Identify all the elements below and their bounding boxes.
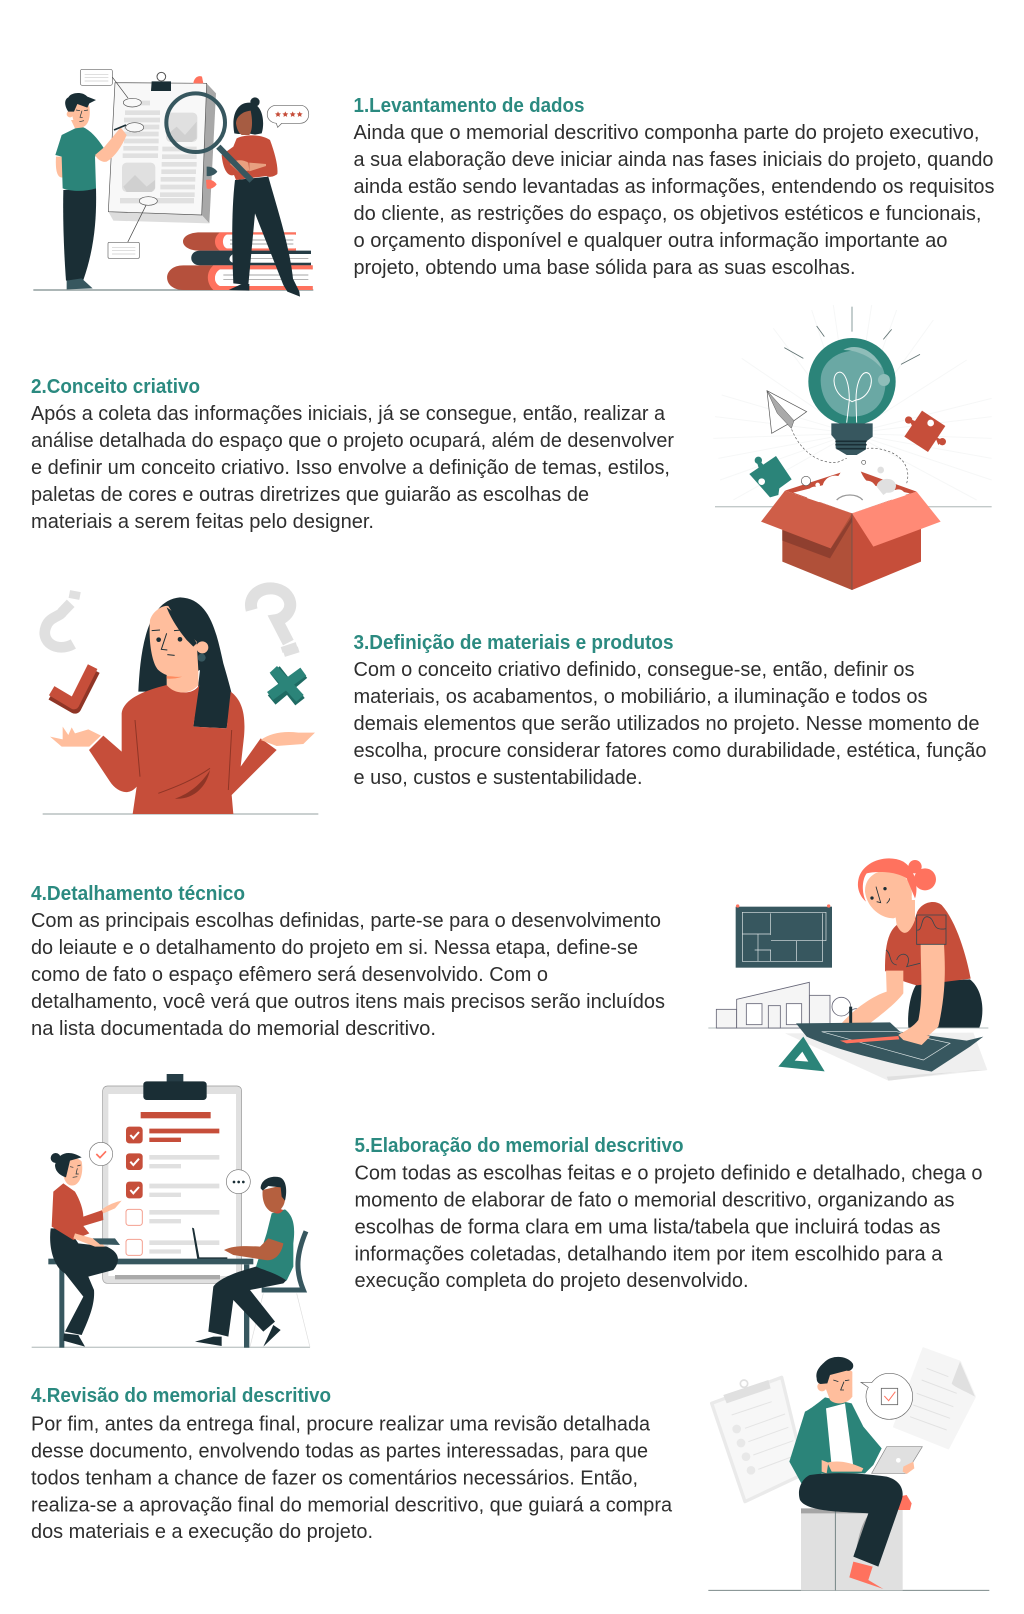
body 5: execução completa do projeto desenvolvido.: [354, 1270, 748, 1292]
red puzzle piece: [904, 411, 946, 452]
woman: [218, 97, 300, 297]
body 1: Ainda que o memorial descritivo componha parte do projeto executivo,: [354, 122, 980, 144]
books: [167, 232, 313, 290]
body 3: materiais, os acabamentos, o mobiliário, a iluminação e todos os: [354, 686, 928, 708]
illustration: woman drawing technical plans: [708, 858, 988, 1081]
body 4: detalhamento, você verá que outros itens mais precisos serão incluídos: [31, 991, 665, 1013]
body 4: na lista documentada do memorial descritivo.: [31, 1018, 436, 1040]
body 6: [31, 1414, 673, 1543]
body 4: do leiaute e o detalhamento do projeto em si. Nessa etapa, define-se: [31, 937, 638, 959]
illustration: woman shrugging between options: [43, 588, 318, 814]
speech bubble: check: [89, 1142, 113, 1166]
clipboard: [712, 1377, 805, 1502]
wall blueprint: [736, 904, 832, 968]
document: [80, 69, 217, 258]
illustration: man reviewing on a laptop: [708, 1348, 989, 1590]
heading 2: 2.Conceito criativo: [31, 376, 200, 398]
text block 5: [354, 1135, 982, 1292]
body 4: como de fato o espaço efêmero será desenvolvido. Com o: [31, 964, 548, 986]
clipboard checklist: [103, 1074, 242, 1283]
heading 1: 1.Levantamento de dados: [354, 95, 584, 117]
body 3: e uso, custos e sustentabilidade.: [354, 767, 642, 789]
text block 4: [31, 883, 665, 1040]
body 6: Por fim, antes da entrega final, procure realizar uma revisão detalhada: [31, 1414, 651, 1436]
heading 6: 4.Revisão do memorial descritivo: [31, 1385, 331, 1407]
text block 6: [31, 1385, 673, 1543]
chair: [250, 1231, 310, 1347]
document: [894, 1348, 975, 1448]
body 1: projeto, obtendo uma base sólida para as suas escolhas.: [354, 257, 856, 279]
body 2: e definir um conceito criativo. Isso envolve a definição de temas, estilos,: [31, 457, 670, 479]
illustration: two people with a checklist: [32, 1074, 310, 1348]
body 6: todos tenham a chance de fazer os comentários necessários. Então,: [31, 1468, 638, 1490]
illustration: two people reviewing a document: [33, 69, 313, 297]
body 4: [31, 910, 665, 1040]
body 1: o orçamento disponível e qualquer outra informação importante ao: [354, 230, 948, 252]
body 3: Com o conceito criativo definido, consegue-se, então, definir os: [354, 659, 914, 681]
heading 3: 3.Definição de materiais e produtos: [354, 632, 674, 654]
body 6: dos materiais e a execução do projeto.: [31, 1521, 373, 1543]
man: [789, 1357, 922, 1589]
triangle ruler: [778, 1037, 825, 1071]
woman seated on desk: [50, 1153, 122, 1347]
body 2: [31, 403, 674, 533]
body 5: momento de elaborar de fato o memorial descritivo, organizando as: [354, 1190, 954, 1212]
body 2: análise detalhada do espaço que o projeto ocupará, além de desenvolver: [31, 430, 674, 452]
body 3: escolha, procure considerar fatores como durabilidade, estética, função: [354, 740, 986, 762]
magnifying glass: [166, 93, 225, 152]
body 4: Com as principais escolhas definidas, parte-se para o desenvolvimento: [31, 910, 661, 932]
body 3: demais elementos que serão utilizados no projeto. Nesse momento de: [354, 713, 980, 735]
body 1: ainda estão sendo levantadas as informações, entendendo os requisitos: [354, 176, 994, 198]
body 5: [354, 1162, 982, 1292]
building outline: [716, 982, 862, 1028]
body 5: Com todas as escolhas feitas e o projeto definido e detalhado, chega o: [354, 1162, 982, 1184]
woman: [50, 597, 315, 814]
question marks: [45, 588, 299, 654]
seat block: [801, 1508, 903, 1590]
drawing sheet: [796, 1022, 983, 1072]
woman: [841, 858, 982, 1044]
cross mark: [270, 669, 303, 702]
laptop: [192, 1228, 227, 1259]
man: [55, 93, 127, 289]
open box: [761, 457, 941, 590]
desk: [48, 1259, 253, 1348]
light bulb: [808, 338, 896, 455]
body 6: realiza-se a aprovação final do memorial descritivo, que guiará a compra: [31, 1494, 673, 1516]
body 3: [354, 659, 986, 789]
body 2: materiais a serem feitas pelo designer.: [31, 511, 374, 533]
check mark: [52, 667, 94, 707]
table shadow: [785, 1033, 987, 1081]
body 6: desse documento, envolvendo todas as partes interessadas, para que: [31, 1440, 648, 1462]
text block 3: [354, 632, 986, 789]
text block 1: [354, 95, 994, 279]
text block 2: [31, 376, 674, 533]
body 1: [354, 122, 994, 279]
paper airplane: [767, 391, 807, 433]
teal puzzle piece: [749, 456, 792, 497]
speech bubble: ellipsis: [226, 1170, 250, 1194]
heading 4: 4.Detalhamento técnico: [31, 883, 245, 905]
body 2: paletas de cores e outras diretrizes que guiarão as escolhas de: [31, 484, 589, 506]
body 1: a sua elaboração deve iniciar ainda nas fases iniciais do projeto, quando: [354, 149, 994, 171]
body 2: Após a coleta das informações iniciais, já se consegue, então, realizar a: [31, 403, 666, 425]
speech bubble with checkbox: [861, 1373, 913, 1419]
body 1: do cliente, as restrições do espaço, os objetivos estéticos e funcionais,: [354, 203, 982, 225]
illustration: light bulb rising from a box: [713, 305, 992, 590]
man seated at desk: [195, 1177, 294, 1347]
body 5: informações coletadas, detalhando item por item escolhido para a: [354, 1244, 943, 1266]
rating speech bubble: [267, 105, 309, 127]
heading 5: 5.Elaboração do memorial descritivo: [354, 1135, 684, 1157]
body 5: escolhas de forma clara em uma lista/tabela que incluirá todas as: [354, 1216, 940, 1238]
